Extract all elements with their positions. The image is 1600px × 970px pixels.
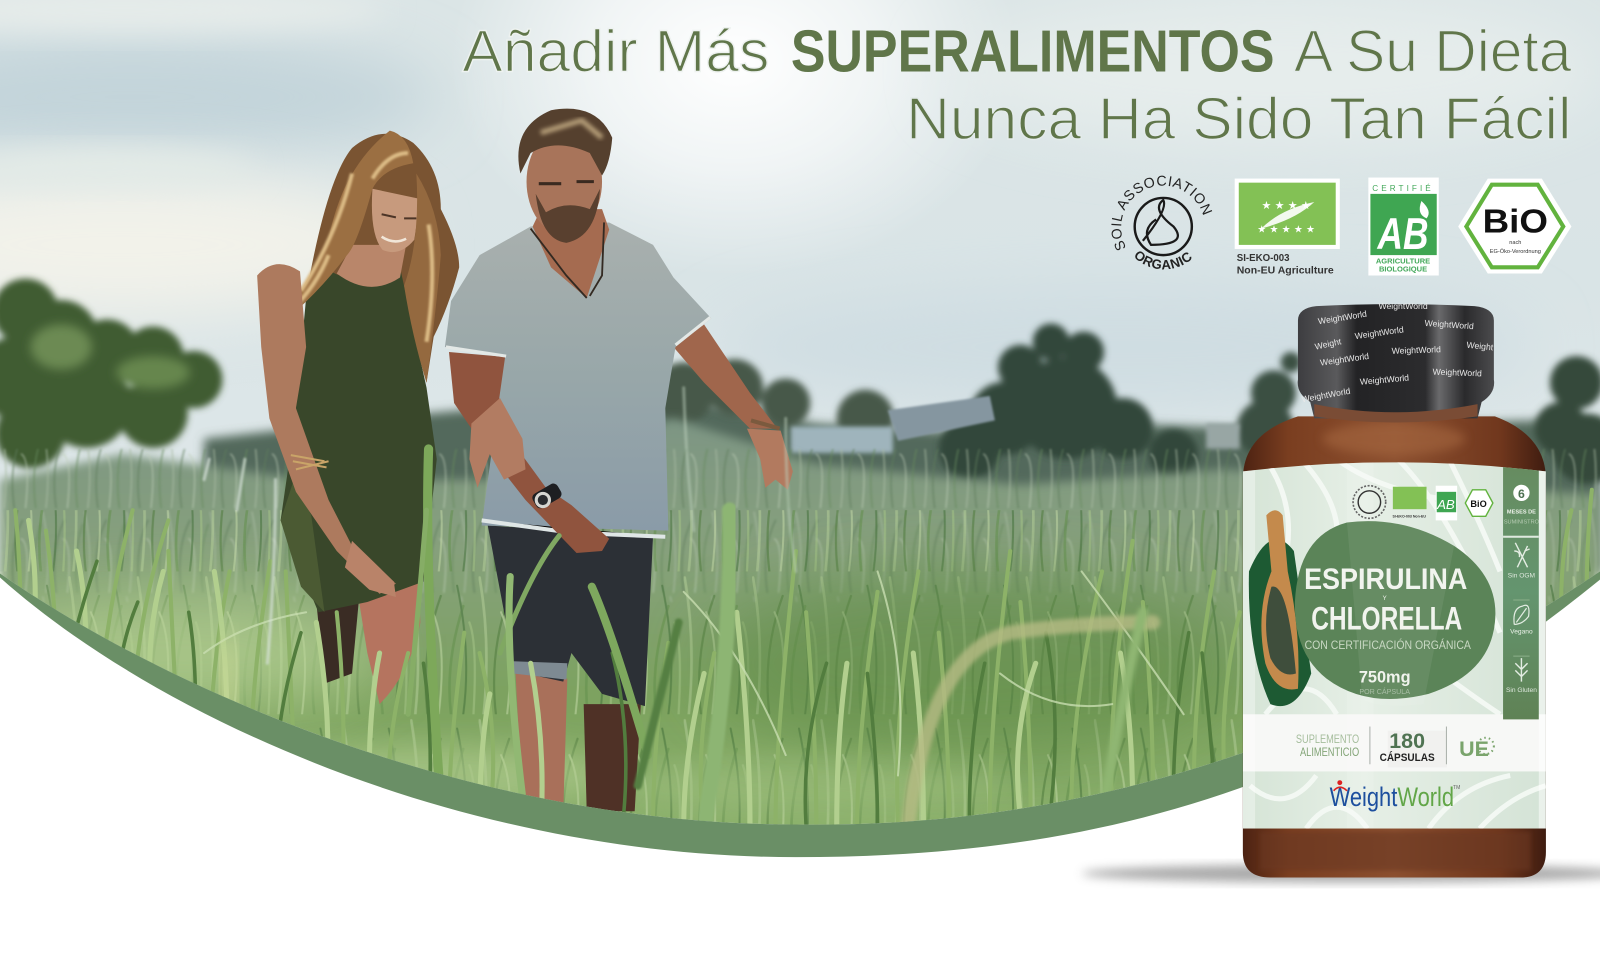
- product name text: [1304, 563, 1471, 696]
- cap: Weight: [1466, 340, 1494, 352]
- cap: WeightWorld: [1301, 386, 1351, 404]
- white band: supplement details: 180: [1389, 729, 1425, 753]
- woman hair front: [302, 130, 414, 305]
- badge: AB agriculture biologique: CERTIFIÉ: [1372, 183, 1434, 193]
- white band: supplement details: UE: [1459, 737, 1489, 761]
- product name text: 750mg: [1359, 669, 1411, 687]
- WeightWorld logo: TM: [1453, 785, 1460, 791]
- spirulina powder and scoop: [1249, 510, 1311, 706]
- WeightWorld logo: WeightWorld: [1330, 782, 1454, 812]
- product name text: Y: [1383, 595, 1387, 602]
- foreground grass blades: [0, 388, 1592, 827]
- side benefits strip: 6: [1518, 487, 1525, 501]
- cap: Weight: [1314, 336, 1343, 352]
- badge: EU organic leaf: Non-EU Agriculture: [1237, 265, 1334, 276]
- cap: WeightWorld: [1354, 324, 1404, 341]
- badge: Bio hexagon: EG-Öko-Verordnung: [1490, 248, 1541, 255]
- side benefits strip: SUMINISTRO: [1504, 519, 1540, 525]
- side benefits strip: Vegano: [1510, 629, 1533, 636]
- badge: AB agriculture biologique: AB: [1377, 208, 1429, 259]
- mini certification logos: SI-EKO-003 Non-EU: [1392, 514, 1426, 518]
- man forearm and hand: [490, 454, 610, 553]
- title: Nunca Ha Sido Tan Fácil: [906, 85, 1571, 152]
- product bottle: [1082, 301, 1600, 883]
- green product blob: [1295, 521, 1495, 699]
- badge: EU organic leaf: [1235, 179, 1340, 276]
- badge: Bio hexagon: [1458, 179, 1571, 273]
- badge: EU organic leaf: ★★★★: [1262, 200, 1314, 212]
- woman: [257, 131, 459, 704]
- certification badges: [1111, 176, 1572, 276]
- side benefits strip: Sin Gluten: [1506, 687, 1537, 694]
- mini certification logos: [1353, 486, 1493, 520]
- background trees and houses: [0, 279, 1600, 571]
- woman arm: [257, 264, 396, 594]
- product name text: CHLORELLA: [1311, 600, 1462, 637]
- man: [445, 109, 793, 811]
- badge: Bio hexagon: BiO: [1483, 204, 1548, 241]
- badge: EU organic leaf: SI-EKO-003: [1237, 253, 1290, 264]
- white band: supplement details: CÁPSULAS: [1380, 751, 1435, 764]
- cap: WeightWorld: [1317, 309, 1368, 326]
- title: Añadir Más: [462, 17, 769, 84]
- white band: supplement details: ALIMENTICIO: [1300, 746, 1359, 759]
- badge: AB agriculture biologique: BIOLOGIQUE: [1379, 264, 1427, 273]
- curved green band: [0, 571, 1600, 970]
- woman hair back: [306, 134, 459, 383]
- white band: supplement details: [1296, 727, 1494, 764]
- badge: AB agriculture biologique: AGRICULTURE: [1376, 256, 1430, 265]
- badge: EU organic leaf: ★★★★★: [1257, 225, 1318, 236]
- product name text: POR CÁPSULA: [1359, 687, 1410, 696]
- grass field: [0, 418, 1600, 847]
- badge: Soil Association Organic: ORGANIC: [1135, 251, 1192, 270]
- title: SUPERALIMENTOS: [791, 17, 1274, 84]
- bottle shadow: [1082, 864, 1600, 883]
- mini certification logos: AB: [1436, 497, 1455, 512]
- cap: WeightWorld: [1378, 301, 1428, 311]
- side benefits strip: [1503, 466, 1540, 719]
- mini certification logos: BiO: [1470, 499, 1487, 509]
- side benefits strip: Sin OGM: [1508, 573, 1535, 580]
- title: A Su Dieta: [1294, 17, 1572, 84]
- side benefits strip: MESES DE: [1507, 509, 1536, 515]
- cap: WeightWorld: [1319, 351, 1370, 368]
- badge: Bio hexagon: nach: [1509, 240, 1521, 246]
- white band: supplement details: SUPLEMENTO: [1296, 733, 1359, 746]
- sky with clouds: [0, 0, 1600, 571]
- cap: [1298, 301, 1494, 422]
- badge: AB agriculture biologique: [1368, 178, 1439, 276]
- cap: WeightWorld: [1391, 344, 1441, 356]
- product name text: CON CERTIFICACIÓN ORGÁNICA: [1305, 639, 1471, 652]
- product name text: ESPIRULINA: [1304, 563, 1467, 596]
- glass body: [1243, 416, 1546, 878]
- label: [1243, 453, 1546, 830]
- badge: Soil Association Organic: SOIL ASSOCIATION: [1111, 176, 1212, 250]
- cap: WeightWorld: [1359, 373, 1410, 387]
- cap: WeightWorld: [1424, 318, 1474, 331]
- title: [462, 17, 1572, 152]
- cap: WeightWorld: [1432, 367, 1482, 378]
